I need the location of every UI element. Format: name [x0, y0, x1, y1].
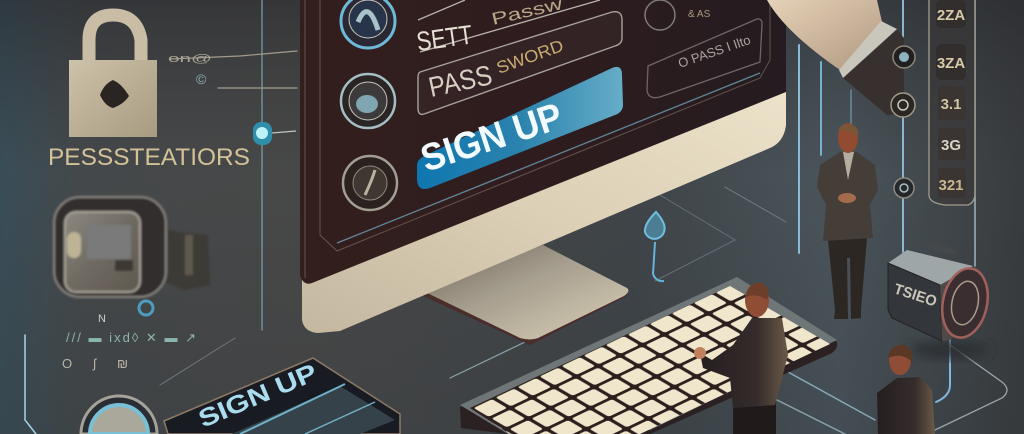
right screen widgets: O PASS I Ilto	[676, 32, 752, 71]
set field: Passw	[490, 0, 565, 29]
monitor screen	[300, 0, 786, 284]
box top	[888, 250, 973, 286]
device: backup box	[888, 240, 994, 358]
person: keyboard operator	[694, 283, 788, 434]
sign up card	[164, 358, 400, 434]
sleeve	[843, 30, 904, 115]
panel values	[937, 7, 965, 194]
password field: PASS	[426, 59, 495, 103]
icon: padlock	[69, 15, 157, 137]
right screen widgets	[645, 0, 762, 98]
device body	[54, 197, 166, 297]
small labels near lock: on@	[168, 53, 212, 65]
sign up button	[416, 67, 623, 189]
person: foreground man	[877, 345, 935, 434]
knob bottom left	[81, 396, 157, 434]
monitor cream frame	[300, 85, 786, 333]
heading: lock label: PESSSTEATIORS	[48, 144, 250, 171]
person: standing man	[817, 123, 878, 319]
panel values: 321	[938, 177, 964, 194]
icon: teardrop pin	[645, 212, 665, 281]
set field	[415, 0, 600, 57]
box side	[940, 267, 985, 341]
icon: blue status dot	[253, 122, 296, 145]
icon: teal drop	[139, 301, 153, 315]
hand	[767, 0, 882, 70]
panel values: 3G	[941, 137, 961, 154]
lock body	[69, 60, 157, 137]
rear bracket	[155, 225, 210, 290]
set field: SETT	[415, 19, 474, 57]
connector buttons	[891, 46, 915, 198]
device screen	[65, 212, 140, 292]
password field	[418, 12, 622, 114]
small labels near lock	[168, 53, 212, 87]
monitor	[300, 0, 786, 345]
icon: camera device	[54, 197, 210, 297]
box label: TSIEO	[892, 281, 939, 310]
right screen widgets: & AS	[688, 9, 711, 20]
monitor stand	[423, 245, 628, 345]
hand reaching to screen	[767, 0, 904, 115]
small glyph notes: /// ▬ ixd◊ ✕ ▬ ↗	[66, 330, 196, 345]
small glyph notes: O ʃ ₪	[62, 356, 128, 371]
keyhole	[100, 80, 129, 108]
keyboard base	[460, 278, 837, 434]
shackle	[89, 15, 141, 62]
box shadow	[910, 342, 990, 358]
card heading: SIGN UP	[194, 359, 321, 434]
keyboard	[460, 277, 837, 434]
box front	[888, 263, 942, 341]
panel values: 2ZA	[937, 7, 965, 24]
small glyph notes	[62, 313, 196, 371]
password field: SWORD	[494, 36, 566, 78]
small labels near lock: ©	[196, 71, 207, 87]
panel: version list	[929, 0, 975, 205]
sign up label: SIGN UP	[416, 95, 568, 181]
panel values: 3ZA	[937, 55, 965, 72]
small glyph notes: N	[98, 313, 106, 325]
box cap	[936, 264, 994, 342]
cuff	[839, 21, 897, 78]
edge and inner frame lines	[305, 0, 770, 278]
screen round icons	[341, 0, 397, 210]
keys	[470, 286, 830, 434]
panel values: 3.1	[941, 96, 961, 113]
box handle	[925, 240, 957, 256]
